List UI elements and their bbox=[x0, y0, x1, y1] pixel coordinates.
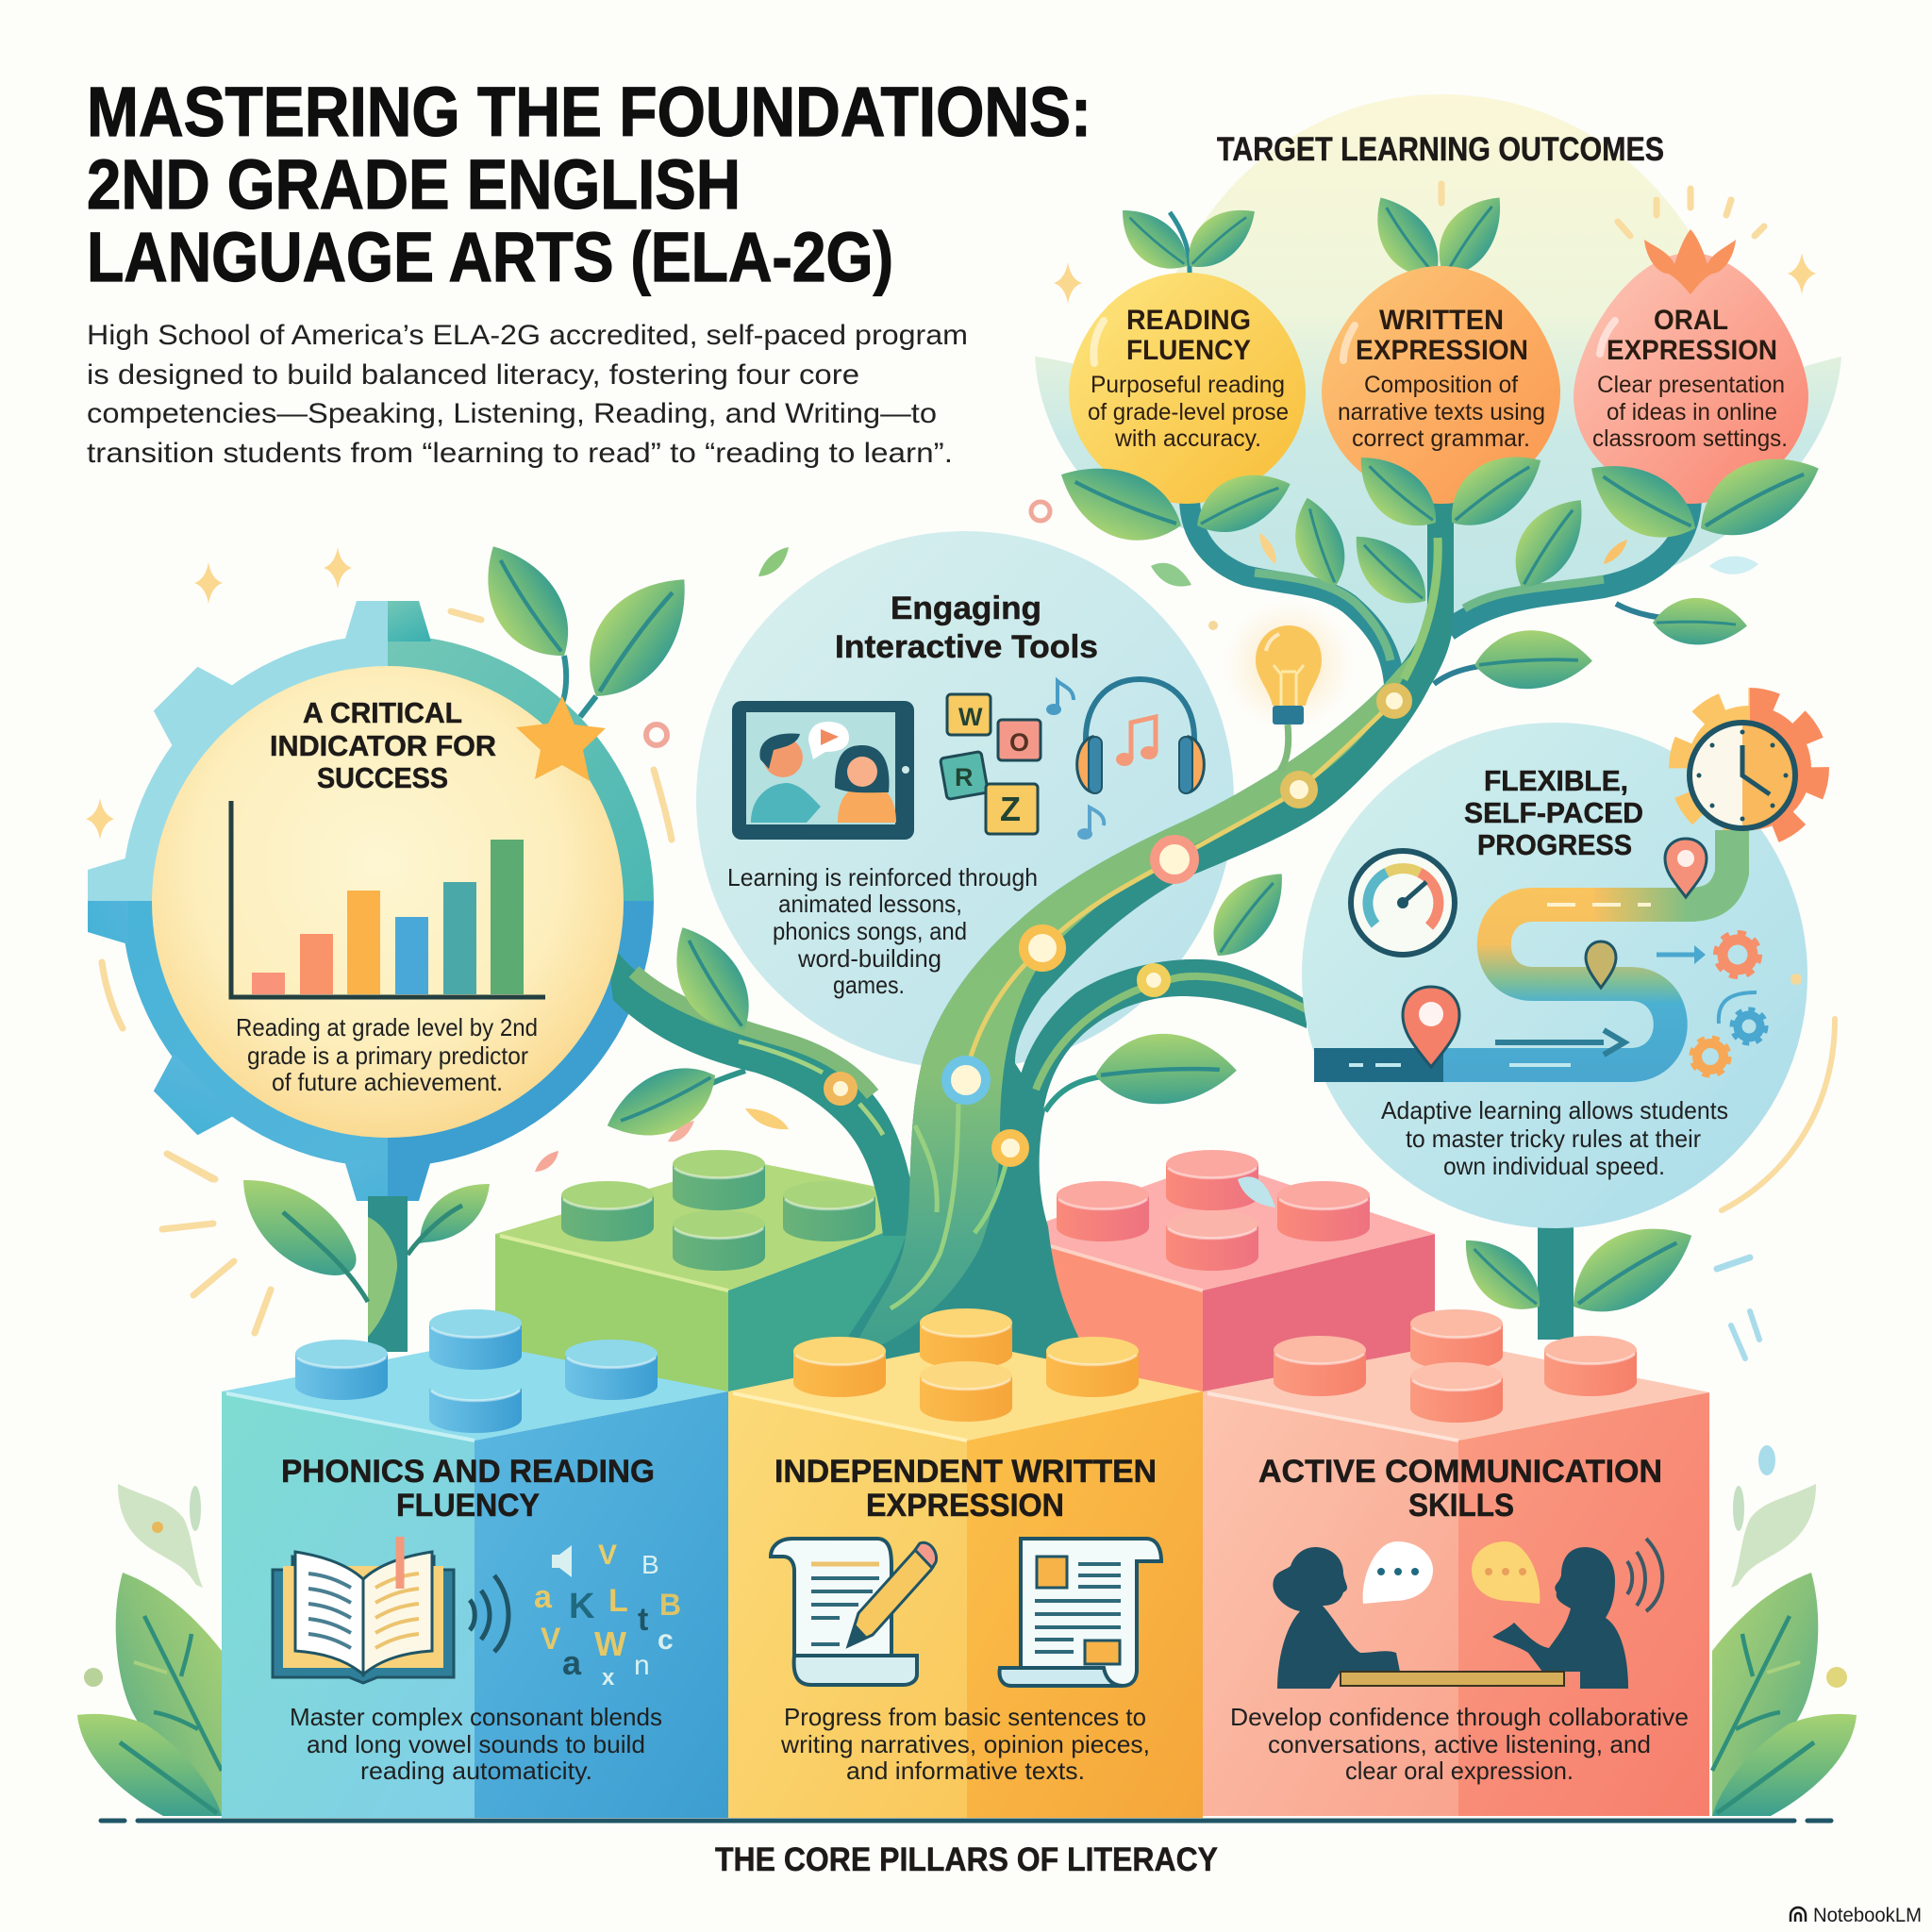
icon: winding road bbox=[1314, 830, 1732, 1065]
heading: outcomes: TARGET LEARNING OUTCOMES bbox=[1217, 131, 1664, 168]
body: phonics: and long vowel sounds to build bbox=[307, 1730, 645, 1758]
icon: headphones bbox=[1046, 679, 1204, 840]
body: critical indicator: grade is a primary predictor bbox=[247, 1041, 528, 1070]
body: communication: clear oral expression. bbox=[1345, 1757, 1574, 1785]
body: written: and informative texts. bbox=[846, 1757, 1085, 1785]
heading: critical indicator bbox=[270, 696, 496, 794]
icon: tablet bbox=[732, 701, 914, 840]
body: flexible progress bbox=[1381, 1096, 1728, 1180]
heading: flexible progress bbox=[1464, 764, 1643, 861]
icon: scattered letters: V bbox=[598, 1540, 617, 1571]
fruit: written expression: WRITTEN bbox=[1379, 305, 1504, 336]
heading: flexible progress: SELF-PACED bbox=[1464, 796, 1643, 829]
icon: scattered letters: n bbox=[634, 1650, 650, 1681]
fruit stems bbox=[1190, 500, 1690, 684]
fruit: reading fluency bbox=[1069, 193, 1306, 504]
body: communication bbox=[1230, 1703, 1689, 1785]
icon: scattered letters: W bbox=[594, 1624, 626, 1663]
bar chart bbox=[231, 801, 545, 997]
front brick: yellow, independent written expression bbox=[728, 1308, 1203, 1818]
title bbox=[87, 73, 1091, 296]
icon: scattered letters: t bbox=[638, 1602, 648, 1638]
title: MASTERING THE FOUNDATIONS: bbox=[87, 73, 1091, 151]
golden vine line bbox=[971, 701, 1394, 1057]
fruit: reading fluency: Purposeful reading bbox=[1091, 372, 1285, 398]
front brick: pink, active communication skills bbox=[1203, 1309, 1709, 1816]
icon: document scroll bbox=[1000, 1539, 1161, 1686]
fruit: written expression: EXPRESSION bbox=[1356, 335, 1528, 366]
fruit: oral expression: EXPRESSION bbox=[1607, 335, 1777, 366]
intro paragraph: competencies—Speaking, Listening, Reading, and Writing—to bbox=[87, 398, 937, 429]
heading: interactive tools: Interactive Tools bbox=[835, 629, 1098, 665]
icon: letter tiles bbox=[941, 694, 1041, 834]
icon: star bbox=[516, 696, 606, 781]
intro paragraph: is designed to build balanced literacy, fostering four core bbox=[87, 359, 859, 391]
trunk veins bbox=[891, 538, 1438, 1308]
baseline rule bbox=[101, 1819, 1831, 1823]
fruit: reading fluency: READING bbox=[1126, 305, 1251, 336]
heading: interactive tools bbox=[835, 591, 1098, 665]
icon: sound waves bbox=[470, 1575, 508, 1652]
icon: speed gauge bbox=[1351, 851, 1455, 955]
heading: critical indicator: SUCCESS bbox=[317, 761, 448, 794]
vine nodes bbox=[828, 688, 1407, 1162]
heading: written: EXPRESSION bbox=[866, 1488, 1064, 1524]
body: flexible progress: own individual speed. bbox=[1443, 1152, 1665, 1180]
icon: scattered letters: K bbox=[569, 1587, 595, 1626]
body: flexible progress: Adaptive learning allows students bbox=[1381, 1096, 1728, 1124]
title: LANGUAGE ARTS (ELA-2G) bbox=[87, 218, 893, 296]
body: critical indicator: of future achievement. bbox=[272, 1068, 503, 1096]
fruit: written expression: narrative texts using bbox=[1338, 399, 1545, 425]
icon: small gears and arrow bbox=[1657, 933, 1766, 1075]
icon: scattered letters: c bbox=[658, 1624, 674, 1656]
icon: two people talking bbox=[1273, 1539, 1662, 1689]
panel: target learning outcomes bbox=[1047, 131, 1832, 558]
front brick: blue, phonics and reading fluency bbox=[222, 1309, 728, 1818]
title: 2ND GRADE ENGLISH bbox=[87, 145, 741, 224]
intro paragraph bbox=[87, 320, 968, 469]
heading: interactive tools: Engaging bbox=[891, 591, 1041, 626]
heading: phonics bbox=[281, 1454, 655, 1524]
back brick: red bbox=[1011, 1150, 1435, 1396]
fruit: oral expression: classroom settings. bbox=[1592, 425, 1788, 452]
body: phonics: Master complex consonant blends bbox=[290, 1703, 662, 1731]
heading: communication: SKILLS bbox=[1408, 1488, 1514, 1524]
icon: scattered letters: a bbox=[534, 1579, 553, 1615]
intro paragraph: transition students from “learning to read” to “reading to learn”. bbox=[87, 438, 953, 469]
icon: scattered letters: V bbox=[541, 1622, 561, 1656]
icon: scattered letters: a bbox=[562, 1643, 582, 1682]
heading: flexible progress: FLEXIBLE, bbox=[1484, 764, 1628, 797]
fruit: written expression: Composition of bbox=[1364, 372, 1518, 398]
body: critical indicator: Reading at grade level by 2nd bbox=[236, 1013, 538, 1041]
heading: critical indicator: A CRITICAL bbox=[303, 696, 462, 729]
icon: open book bbox=[273, 1537, 454, 1683]
panel: interactive tools bbox=[727, 591, 1204, 999]
panel: flexible progress bbox=[1302, 698, 1819, 1228]
body: flexible progress: to master tricky rules at their bbox=[1406, 1124, 1701, 1153]
body: interactive tools: Learning is reinforced through bbox=[727, 863, 1038, 891]
body: phonics bbox=[290, 1703, 662, 1785]
panel: critical indicator bbox=[152, 666, 624, 1138]
icon: scattered letters bbox=[534, 1540, 681, 1690]
decorative sparkles and dashes bbox=[86, 184, 1835, 1358]
icon: gear behind clock bbox=[1679, 698, 1819, 838]
icon: letter tiles: O bbox=[1009, 728, 1029, 757]
heading: communication: ACTIVE COMMUNICATION bbox=[1258, 1454, 1662, 1490]
panel backdrop: interactive tools circle bbox=[696, 531, 1234, 1069]
fruit: reading fluency: FLUENCY bbox=[1126, 335, 1251, 366]
backdrop: outcomes glow bbox=[1035, 94, 1841, 672]
icon: scattered letters: B bbox=[659, 1588, 681, 1622]
tree: branches and trunk bbox=[604, 500, 1690, 1368]
heading: written: INDEPENDENT WRITTEN bbox=[774, 1454, 1157, 1490]
stem and leaves under flex circle bbox=[1447, 1203, 1707, 1340]
body: written: writing narratives, opinion pieces, bbox=[780, 1730, 1150, 1758]
left branch to gear bbox=[604, 929, 920, 1236]
icon: scattered letters: x bbox=[602, 1665, 615, 1690]
fruit: reading fluency: of grade-level prose bbox=[1088, 399, 1289, 425]
fruit: oral expression bbox=[1574, 229, 1808, 504]
fruit: oral expression: ORAL bbox=[1654, 305, 1728, 336]
footer label: THE CORE PILLARS OF LITERACY bbox=[715, 1841, 1218, 1878]
body: interactive tools: word-building bbox=[797, 944, 941, 973]
icon: scroll and pencil bbox=[771, 1539, 937, 1685]
fruit: written expression bbox=[1322, 182, 1560, 504]
body: critical indicator bbox=[236, 1013, 538, 1096]
heading: phonics: FLUENCY bbox=[396, 1488, 540, 1524]
corner leaves: right bbox=[1712, 1445, 1857, 1816]
second branch to flex circle bbox=[1014, 959, 1307, 1141]
tree leaves bbox=[463, 484, 1758, 1156]
body: written: Progress from basic sentences to bbox=[784, 1703, 1146, 1731]
heading: written bbox=[774, 1454, 1157, 1524]
icon: scattered letters: B bbox=[641, 1550, 659, 1579]
intro paragraph: High School of America’s ELA-2G accredited, self-paced program bbox=[87, 320, 968, 351]
gear ring bbox=[88, 601, 654, 1201]
icon: lightbulb bbox=[1223, 599, 1355, 771]
body: phonics: reading automaticity. bbox=[360, 1757, 592, 1785]
body: interactive tools: phonics songs, and bbox=[773, 917, 967, 945]
fruit: oral expression: of ideas in online bbox=[1607, 399, 1777, 425]
heading: flexible progress: PROGRESS bbox=[1477, 828, 1632, 861]
heading: phonics: PHONICS AND READING bbox=[281, 1454, 655, 1490]
body: written bbox=[780, 1703, 1150, 1785]
body: communication: Develop confidence through collaborative bbox=[1230, 1703, 1689, 1731]
body: interactive tools: games. bbox=[833, 971, 905, 999]
icon: letter tiles: R bbox=[955, 763, 974, 791]
under-fruit leaves bbox=[1047, 436, 1832, 558]
icon: letter tiles: Z bbox=[1000, 790, 1021, 828]
main trunk bbox=[830, 500, 1454, 1368]
heading: critical indicator: INDICATOR FOR bbox=[270, 729, 496, 762]
corner leaves: left bbox=[77, 1484, 222, 1816]
fruit: written expression: correct grammar. bbox=[1352, 425, 1530, 452]
body: interactive tools bbox=[727, 863, 1038, 999]
body: interactive tools: animated lessons, bbox=[778, 890, 962, 918]
back brick: green bbox=[495, 1150, 961, 1396]
icon: clock bbox=[1690, 723, 1795, 828]
body: communication: conversations, active listening, and bbox=[1268, 1730, 1651, 1758]
fruit: reading fluency: with accuracy. bbox=[1114, 425, 1261, 452]
NotebookLM mark: NotebookLM bbox=[1813, 1905, 1922, 1926]
icon: letter tiles: W bbox=[958, 703, 983, 731]
stem and leaves under gear bbox=[243, 1180, 490, 1352]
icon: scattered letters: L bbox=[608, 1583, 628, 1619]
heading: communication bbox=[1258, 1454, 1662, 1524]
trunk green side bbox=[849, 651, 1415, 1358]
fruit: oral expression: Clear presentation bbox=[1597, 372, 1785, 398]
icon: map pins bbox=[1403, 839, 1707, 1067]
